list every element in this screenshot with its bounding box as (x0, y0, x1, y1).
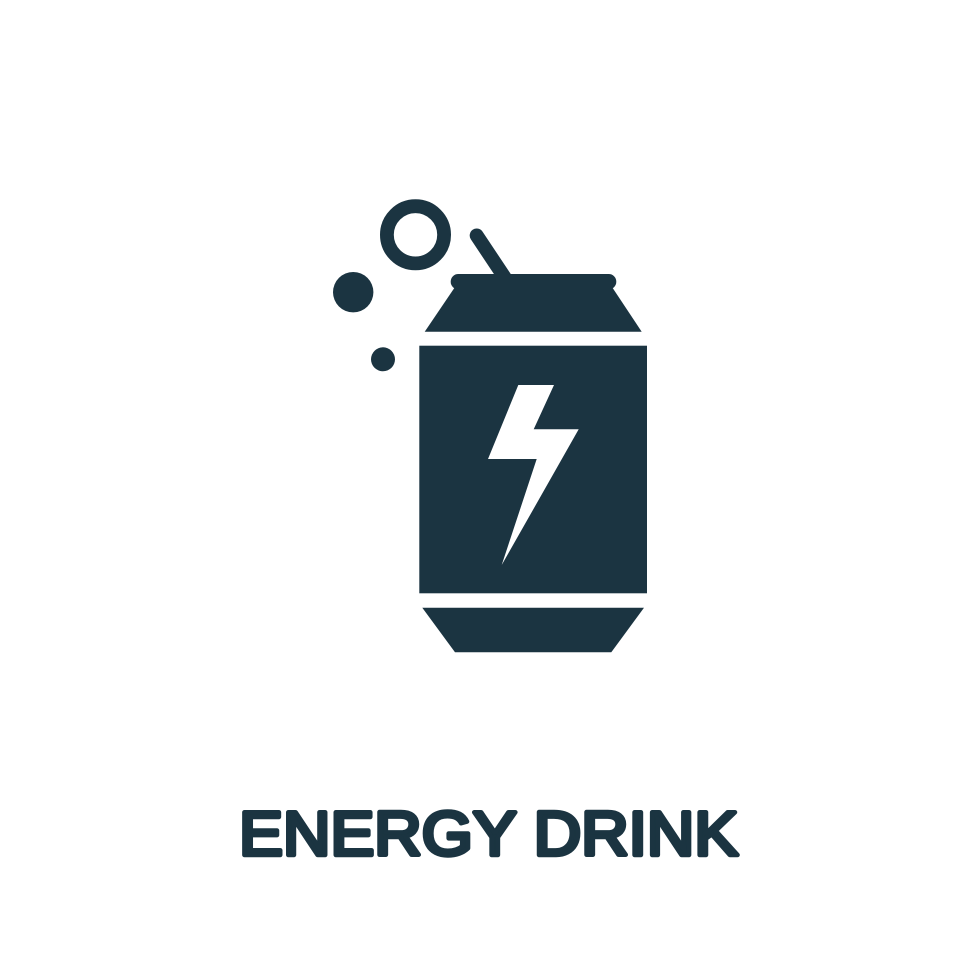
icon: energy drink can with bubbles (333, 206, 647, 652)
icon: small bubble (371, 347, 395, 371)
title: ENERGY DRINK (239, 800, 738, 869)
icon: can lid rim (451, 274, 616, 289)
icon: can bottom taper (422, 608, 644, 652)
icon: can body (419, 346, 647, 593)
icon: medium bubble (333, 272, 373, 312)
icon: large ring bubble (387, 206, 444, 263)
icon: can top taper (425, 287, 642, 332)
icon: straw (477, 236, 505, 278)
icon: lightning bolt (488, 385, 579, 565)
